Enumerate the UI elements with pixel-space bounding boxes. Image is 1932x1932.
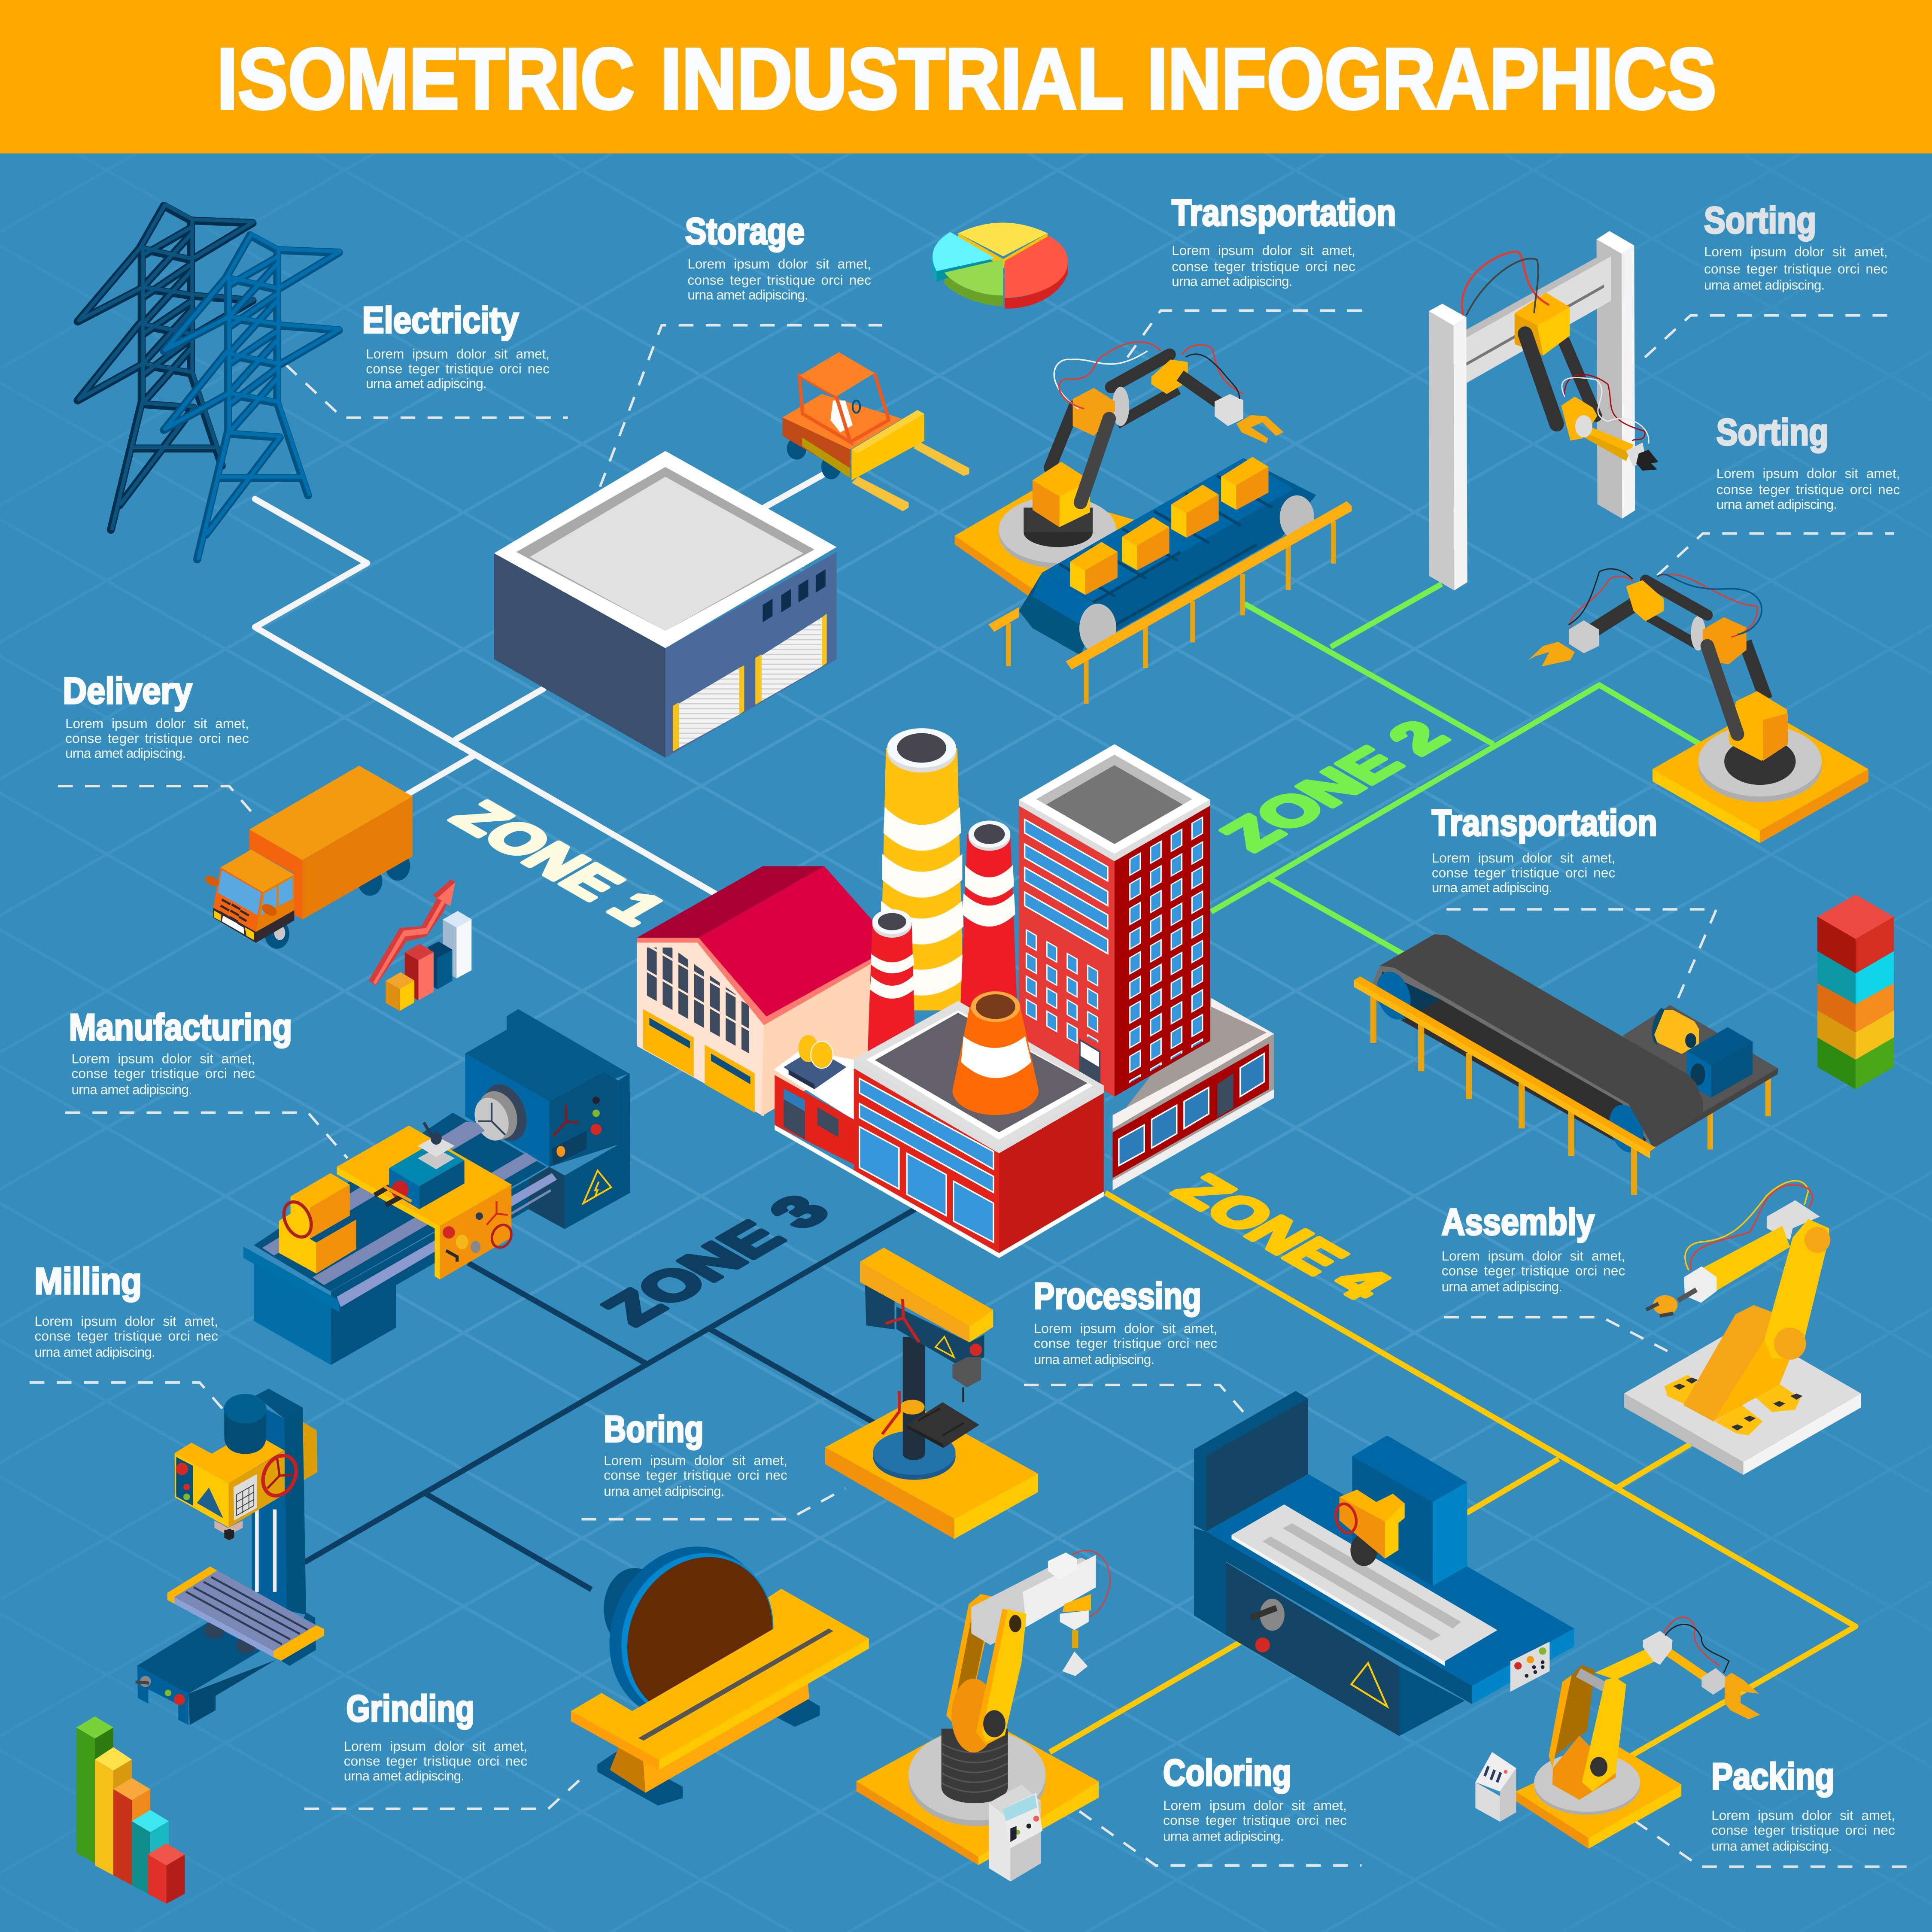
- description: Lorem ipsum dolor sit amet,: [34, 1313, 218, 1329]
- text block: Storage: [685, 211, 871, 302]
- description: urna amet adipiscing.: [1716, 496, 1837, 512]
- text block: Transportation middle: [1432, 802, 1657, 895]
- description: Lorem ipsum dolor sit amet,: [687, 256, 871, 272]
- description: Lorem ipsum dolor sit amet,: [1711, 1807, 1895, 1823]
- small red chimney: [867, 909, 915, 1060]
- icon: processing milling machine: [1194, 1391, 1574, 1736]
- icon: right robot arm on platform: [1528, 569, 1868, 843]
- back low building: [1113, 998, 1274, 1190]
- heading: Sorting: [1704, 200, 1816, 241]
- description: conse teger tristique orci nec: [1716, 482, 1900, 497]
- description: urna amet adipiscing.: [65, 745, 186, 761]
- description: urna amet adipiscing.: [1163, 1829, 1284, 1844]
- icon: forklift: [783, 352, 969, 511]
- description: [34, 1313, 218, 1360]
- title: INFOGRAPHICS: [1147, 30, 1716, 127]
- text block: Sorting top: [1704, 200, 1888, 292]
- heading: Packing: [1711, 1756, 1835, 1797]
- description: Lorem ipsum dolor sit amet,: [1034, 1321, 1217, 1336]
- description: [1704, 244, 1888, 292]
- header band: [0, 0, 1932, 153]
- description: [344, 1738, 527, 1783]
- low annex with roof unit: [774, 1035, 854, 1164]
- icon: gantry sorting robot: [1429, 231, 1659, 590]
- description: [1716, 466, 1900, 512]
- zone 2 green connector lines: [1211, 584, 1713, 955]
- icon: small rising bar chart with arrow: [369, 879, 471, 1011]
- zone 2 label: ZONE 2: [1207, 712, 1461, 859]
- factory complex: [637, 728, 1274, 1258]
- icon: power towers: [78, 204, 340, 559]
- text block: Boring: [604, 1409, 787, 1499]
- heading: Sorting: [1716, 412, 1829, 453]
- description: Lorem ipsum dolor sit amet,: [604, 1452, 787, 1468]
- text block: Sorting lower: [1716, 412, 1900, 512]
- icon: delivery truck: [204, 766, 413, 949]
- description: urna amet adipiscing.: [1442, 1279, 1562, 1294]
- text block: Processing: [1034, 1276, 1217, 1367]
- text block: Grinding: [344, 1688, 527, 1783]
- icon: warehouse: [494, 451, 837, 758]
- description: Lorem ipsum dolor sit amet,: [366, 346, 550, 361]
- pink gabled hall: [637, 866, 874, 1116]
- description: conse teger tristique orci nec: [34, 1328, 218, 1343]
- description: [1711, 1807, 1895, 1854]
- front red building: [775, 1001, 1104, 1258]
- heading: Boring: [604, 1409, 704, 1450]
- description: urna amet adipiscing.: [1711, 1838, 1832, 1854]
- zone 1 label: ZONE 1: [437, 793, 680, 933]
- description: Lorem ipsum dolor sit amet,: [1163, 1798, 1347, 1813]
- icon: coloring robot: [857, 1550, 1110, 1881]
- zone 3 navy connector lines: [304, 1207, 918, 1589]
- description: conse teger tristique orci nec: [1711, 1822, 1895, 1838]
- description: conse teger tristique orci nec: [1163, 1812, 1347, 1828]
- description: conse teger tristique orci nec: [1034, 1336, 1217, 1351]
- description: Lorem ipsum dolor sit amet,: [1716, 466, 1900, 481]
- text block: Milling: [34, 1261, 218, 1360]
- heading: Assembly: [1442, 1202, 1595, 1243]
- zone 4 label: ZONE 4: [1159, 1166, 1404, 1308]
- icon: conveyor robot: [955, 342, 1352, 704]
- description: conse teger tristique orci nec: [344, 1753, 527, 1769]
- icon: lathe: [243, 1009, 630, 1365]
- description: Lorem ipsum dolor sit amet,: [1172, 243, 1355, 258]
- description: conse teger tristique orci nec: [1442, 1263, 1625, 1278]
- description: [1432, 850, 1615, 895]
- description: conse teger tristique orci nec: [1432, 865, 1615, 880]
- zone 3 label: ZONE 3: [589, 1186, 843, 1334]
- text block: Electricity: [362, 300, 550, 391]
- icon: milling machine: [136, 1388, 324, 1725]
- description: urna amet adipiscing.: [1704, 277, 1825, 292]
- text block: Coloring: [1163, 1752, 1347, 1844]
- description: urna amet adipiscing.: [604, 1483, 725, 1499]
- text block: Packing: [1711, 1756, 1895, 1854]
- zone 4 yellow connector lines: [1050, 1193, 1856, 1757]
- tall office block: [1019, 744, 1210, 1097]
- description: urna amet adipiscing.: [1172, 273, 1293, 289]
- description: conse teger tristique orci nec: [65, 731, 249, 746]
- description: [1442, 1248, 1625, 1294]
- icon: packing robot: [1475, 1617, 1760, 1849]
- description: urna amet adipiscing.: [1432, 880, 1552, 895]
- description: Lorem ipsum dolor sit amet,: [344, 1738, 527, 1754]
- description: [71, 1051, 255, 1097]
- description: conse teger tristique orci nec: [604, 1467, 787, 1483]
- middle red chimney: [960, 820, 1018, 1023]
- title: ISOMETRIC: [217, 30, 635, 127]
- icon: drill press: [825, 1248, 1038, 1539]
- description: urna amet adipiscing.: [34, 1344, 155, 1360]
- text block: Transportation top: [1172, 192, 1396, 289]
- description: [366, 346, 550, 391]
- description: conse teger tristique orci nec: [1704, 261, 1888, 276]
- icon: pie chart: [932, 222, 1068, 309]
- title: INDUSTRIAL: [660, 30, 1124, 127]
- description: [687, 256, 871, 302]
- description: urna amet adipiscing.: [687, 287, 808, 302]
- description: Lorem ipsum dolor sit amet,: [1704, 244, 1888, 259]
- text block: Assembly: [1442, 1202, 1625, 1294]
- description: [65, 716, 249, 761]
- description: [1172, 243, 1355, 289]
- heading: Coloring: [1163, 1752, 1291, 1793]
- description: [1034, 1321, 1217, 1367]
- description: urna amet adipiscing.: [366, 376, 487, 391]
- description: Lorem ipsum dolor sit amet,: [1432, 850, 1615, 866]
- heading: Processing: [1034, 1276, 1201, 1317]
- description: Lorem ipsum dolor sit amet,: [1442, 1248, 1625, 1264]
- heading: Milling: [34, 1261, 142, 1302]
- orange cone chimney: [952, 991, 1039, 1115]
- description: conse teger tristique orci nec: [366, 361, 550, 377]
- text block: Delivery: [63, 671, 249, 761]
- icon: grinding machine: [571, 1521, 869, 1806]
- zone 1 white connector lines: [255, 472, 828, 893]
- description: Lorem ipsum dolor sit amet,: [71, 1051, 255, 1066]
- icon: black belt conveyor with motor: [1354, 934, 1778, 1195]
- icon: stepped bar chart: [76, 1716, 185, 1904]
- description: conse teger tristique orci nec: [71, 1066, 255, 1081]
- heading: Transportation: [1172, 192, 1396, 234]
- description: [604, 1452, 787, 1499]
- dashed leader lines: [30, 310, 1910, 1867]
- description: conse teger tristique orci nec: [687, 272, 871, 288]
- yellow chimney: [880, 728, 963, 1010]
- text block: Manufacturing: [69, 1007, 292, 1097]
- heading: Delivery: [63, 671, 192, 712]
- heading: Electricity: [362, 300, 519, 341]
- heading: Grinding: [346, 1688, 474, 1729]
- heading: Storage: [685, 211, 805, 252]
- heading: Transportation: [1432, 802, 1657, 844]
- description: [1163, 1798, 1347, 1844]
- description: conse teger tristique orci nec: [1172, 258, 1355, 274]
- icon: assembly robot: [1624, 1181, 1861, 1475]
- description: urna amet adipiscing.: [344, 1768, 465, 1783]
- description: Lorem ipsum dolor sit amet,: [65, 716, 249, 731]
- icon: stacked blocks: [1817, 895, 1894, 1089]
- heading: Manufacturing: [69, 1007, 292, 1048]
- title: [217, 30, 1716, 127]
- description: urna amet adipiscing.: [71, 1081, 192, 1097]
- description: urna amet adipiscing.: [1034, 1352, 1154, 1367]
